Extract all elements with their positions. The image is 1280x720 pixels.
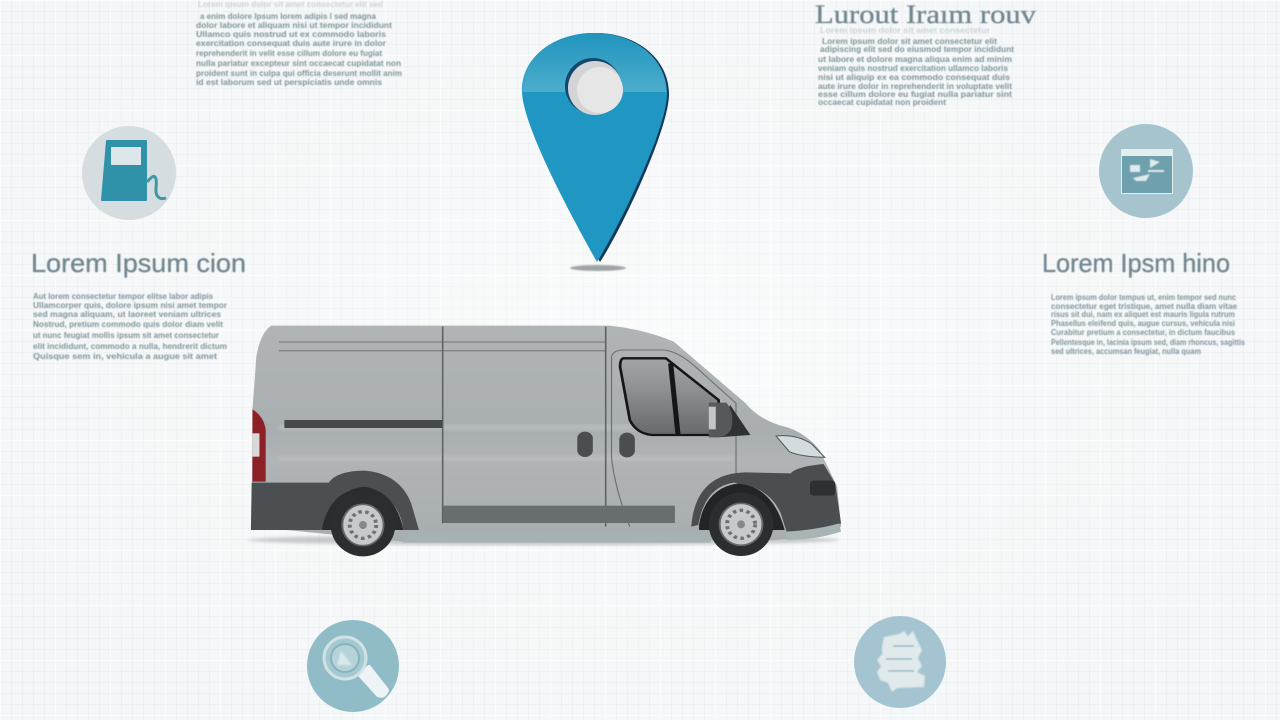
- sill: [403, 533, 711, 543]
- headlight: [776, 436, 825, 457]
- text block: left: Nostrud, pretium commodo quis dolor diam velit: [33, 320, 223, 329]
- heading: top right: Lurout Iraım rouv: [815, 0, 1036, 29]
- text block: top right: ut labore et dolore magna aliqua enim ad minim: [818, 55, 1012, 64]
- icon: folder with chart: [1099, 124, 1193, 218]
- icon: location pin: [522, 33, 669, 271]
- text block: right: Pellentesque in, lacinia ipsum sed, diam rhoncus, sagittis: [1051, 338, 1245, 347]
- text block: right: Lorem ipsum dolor tempus ut, enim tempor sed nunc: [1051, 293, 1237, 302]
- text block: left: [33, 292, 227, 361]
- text block: top left: reprehenderit in velit esse cillum dolore eu fugiat: [196, 49, 382, 58]
- text block: right: sed ultrices, accumsan feugiat, nulla quam: [1051, 347, 1201, 356]
- text block: top left: Lorem ipsum dolor sit amet consectetur elit sed: [198, 0, 383, 9]
- text block: top right: esse cillum dolore eu fugiat nulla pariatur sint: [818, 90, 1012, 99]
- rear light: [252, 409, 266, 482]
- text block: top right: Lorem ipsum dolor sit amet consectetur elit: [822, 37, 997, 46]
- text block: top right: aute irure dolor in reprehenderit in voluptate velit: [818, 82, 1012, 91]
- rear bumper and arch: [251, 471, 419, 530]
- heading: right: Lorem Ipsm hino: [1042, 248, 1230, 278]
- van body: [252, 326, 841, 542]
- text block: top right: veniam quis nostrud exercitation ullamco laboris: [818, 64, 1009, 73]
- window: [620, 358, 722, 435]
- text block: top right: Lorem ipsum dolor sit amet consectetur: [820, 26, 990, 35]
- text block: right: risus sit dui, nam ex aliquet est mauris ligula rutrum: [1051, 310, 1235, 319]
- text block: top left: [196, 0, 402, 87]
- text block: right: Curabitur pretium a consectetur, in dictum faucibus: [1051, 328, 1236, 337]
- text block: left: ut nunc feugiat mollis ipsum sit amet consectetur: [33, 331, 219, 340]
- front bumper and arch: [691, 464, 841, 532]
- text block: top right: occaecat cupidatat non proident: [818, 98, 946, 107]
- text block: top left: Ullamco quis nostrud ut ex commodo laboris: [196, 30, 387, 39]
- text block: top left: proident sunt in culpa qui officia deserunt mollit anim: [196, 69, 402, 78]
- text block: top right: [818, 26, 1014, 107]
- text block: top left: id est laborum sed ut perspiciatis unde omnis: [196, 78, 383, 87]
- illustration: delivery van: [248, 326, 841, 556]
- text block: left: Quisque sem in, vehicula a augue sit amet: [33, 352, 217, 361]
- text block: top right: adipiscing elit sed do eiusmod tempor incididunt: [820, 45, 1014, 54]
- lower door trim: [443, 506, 675, 523]
- text block: left: Aut lorem consectetur tempor elitse labor adipis: [33, 292, 214, 301]
- text block: top left: a enim dolore Ipsum lorem adipis l sed magna: [200, 12, 377, 21]
- front wheel: [709, 493, 773, 556]
- mirror: [717, 405, 750, 437]
- text block: right: consectetur eget tristique, amet nulla diam vitae: [1051, 302, 1238, 311]
- rear wheel: [322, 487, 403, 556]
- icon: magnifying glass: [307, 620, 399, 712]
- text block: top right: nisi ut aliquip ex ea commodo consequat duis: [818, 73, 1011, 82]
- heading: left: Lorem Ipsum cion: [31, 248, 246, 278]
- text block: top left: nulla pariatur excepteur sint occaecat cupidatat non: [196, 59, 401, 68]
- icon: currency symbol: [854, 616, 946, 708]
- text block: right: Phasellus eleifend quis, augue cursus, vehicula nisi: [1051, 319, 1235, 328]
- text block: top left: exercitation consequat duis aute irure in dolor: [196, 39, 386, 48]
- text block: left: elit incididunt, commodo a nulla, hendrerit dictum: [33, 342, 227, 351]
- icon: fuel pump: [82, 126, 176, 220]
- text block: left: sed magna aliquam, ut laoreet veniam ultrices: [33, 310, 222, 319]
- text block: top left: dolor labore et aliquam nisi ut tempor incididunt: [196, 21, 392, 30]
- door handles: [577, 432, 593, 457]
- text block: right: [1051, 293, 1245, 356]
- text block: left: Ullamcorper quis, dolore ipsum nisi amet tempor: [33, 301, 227, 310]
- side rail: [284, 420, 442, 428]
